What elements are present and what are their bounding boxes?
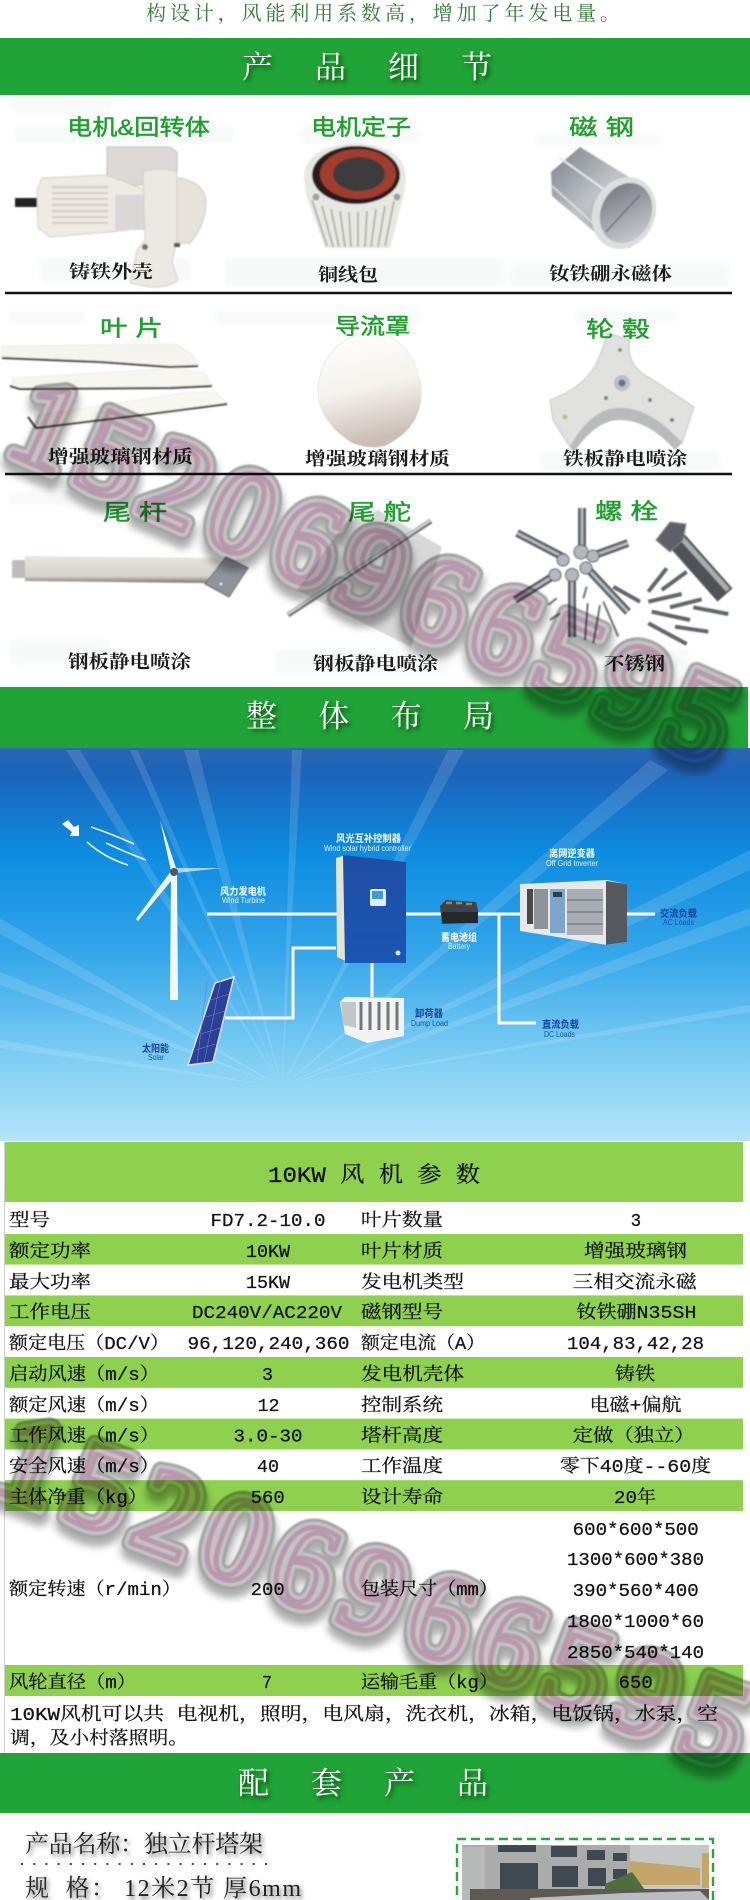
label: solar [142,1042,169,1062]
caption: fiberglass material: 增强玻璃钢材质 [305,448,450,469]
label: AC loads: 交流负载 [660,907,697,920]
row: max power [9,1272,698,1294]
row: rated speed and package size: 额定转速（r/min） [9,1579,181,1601]
row: model: 型号 [9,1210,50,1232]
heading: motor and slewing body: 电机&回转体 [67,115,210,140]
row: rated voltage: 额定电流（A） [361,1333,485,1355]
product name: 产品名称：独立杆塔架 [25,1831,263,1858]
row: rotor diameter: 运输毛重（kg） [361,1672,498,1694]
row: model: 叶片数量 [361,1210,443,1232]
table title: 10KW 风 机 参 数 [268,1163,480,1189]
row: rated wind speed: 12 [258,1397,280,1417]
icon: bolts [515,508,728,644]
heading: motor stator: 电机定子 [311,115,411,140]
label: battery: Battery [448,942,470,951]
panel: product details [2,100,732,674]
icon: hybrid controller [336,855,406,963]
label: dump load: Dump Load [411,1019,448,1028]
watermark: phone number top: 15206966595 [0,352,750,794]
icon: wind turbine [136,820,222,1000]
row: safe wind speed: 40 [257,1458,279,1478]
icon: wind arrow [62,820,146,865]
label: dump load [411,1007,448,1028]
item: blades [2,316,227,467]
heading: bolts: 螺 栓 [595,499,658,524]
section bar: matching products: 配 套 产 品 [238,1766,488,1801]
row: net weight: 主体净重（kg） [9,1487,147,1509]
item: bolts [515,499,728,674]
section bar: product details: 产 品 细 节 [242,50,492,85]
row: rated speed and package size: 390*560*400 [573,1582,699,1602]
icon: tail rod [12,556,248,597]
section bar: product details [0,38,750,95]
label: battery: 蓄电池组 [441,931,477,944]
heading: hub: 轮 毂 [586,317,650,342]
row: working voltage: 磁钢型号 [361,1302,443,1324]
row: working voltage: DC240V/AC220V [192,1304,342,1324]
label: solar: Solar [148,1053,164,1062]
icon: tail vane [288,510,442,647]
icon: battery [440,900,478,924]
sky background [0,748,750,1142]
label: off grid inverter: 离网逆变器 [549,847,595,860]
icon: hub plate [550,333,694,452]
row: working wind speed: 3.0-30 [234,1428,302,1448]
row: net weight: 20年 [614,1486,656,1509]
label: hybrid controller [324,832,411,853]
row: rotor diameter [9,1672,653,1694]
heading: nose cone: 导流罩 [335,314,410,339]
row: start wind speed: 启动风速（m/s） [9,1364,159,1386]
label: hybrid controller: 风光互补控制器 [336,832,401,845]
row: rated voltage: 额定电压（DC/V） [9,1333,169,1355]
label: AC loads: AC Loads [663,918,694,927]
table: 10KW turbine parameters [0,1141,750,1753]
row: start wind speed: 发电机壳体 [361,1364,464,1386]
item: magnet [549,115,672,284]
row: net weight: 设计寿命 [361,1487,443,1509]
row: working voltage: 工作电压 [9,1302,91,1324]
note: usable appliances [10,1704,718,1750]
row: working wind speed: 定做（独立） [573,1426,695,1448]
section bar: matching products [0,1753,750,1813]
row: rated power: 额定功率 [9,1241,91,1263]
row: rated power: 10KW [246,1243,290,1263]
row: net weight [9,1486,656,1509]
row: rated voltage: 104,83,42,28 [567,1335,704,1355]
caption: NdFeB permanent magnet: 钕铁硼永磁体 [549,263,672,284]
row: net weight: 560 [251,1489,285,1509]
row: max power: 15KW [246,1274,290,1294]
row: rated speed and package size: 1300*600*380 [567,1551,704,1571]
row: model: FD7.2-10.0 [210,1212,326,1232]
row: model [9,1210,641,1232]
row: model: 3 [631,1212,641,1232]
row: rated wind speed: 控制系统 [361,1395,443,1417]
caption: stainless steel: 不锈钢 [604,654,665,674]
item: hub [550,317,694,469]
row: rated wind speed [9,1395,682,1417]
watermark: phone number top: 15206966595 [0,352,750,794]
intro text line: 构设计，风能利用系数高，增加了年发电量。 [146,2,620,25]
icon: dump load [340,997,404,1043]
item: tail rod [12,500,248,672]
row: rated speed and package size: 2850*540*140 [567,1644,704,1664]
row: rated speed and package size: 包装尺寸（mm） [361,1579,498,1601]
row: safe wind speed: 零下40度--60度 [560,1456,711,1478]
caption: electrostatic spray iron plate: 铁板静电喷涂 [563,448,688,469]
heading: blades: 叶 片 [100,316,163,341]
label: DC loads: 直流负载 [542,1018,579,1031]
row: rotor diameter: 650 [619,1674,653,1694]
caption: cast iron housing: 铸铁外壳 [69,262,153,282]
section bar: overall layout [0,687,748,748]
label: DC loads [542,1018,579,1039]
watermark: phone number top: 15206966595 [0,360,750,802]
caption: copper coil: 铜线包 [318,265,378,285]
icon: off grid inverter [520,880,627,945]
row: working wind speed [9,1426,695,1448]
label: off grid inverter: Off Grid Inverter [546,859,598,868]
row: safe wind speed: 工作温度 [361,1456,443,1478]
row: rotor diameter: 7 [262,1674,272,1694]
label: off grid inverter [546,847,598,868]
section bar: overall layout: 整 体 布 局 [246,699,494,734]
note: usable appliances: 10KW风机可以共 电视机，照明，电风扇，洗衣机，冰箱，电饭锅，水泵，空 [10,1704,718,1726]
row: rated voltage [9,1333,704,1355]
label: wind turbine [220,885,266,905]
row: rated speed and package size [9,1521,704,1664]
row: rated wind speed: 额定风速（m/s） [9,1395,159,1417]
row: rated speed and package size: 600*600*500 [573,1521,699,1541]
row: max power: 三相交流永磁 [573,1272,698,1294]
row: start wind speed: 铸铁 [615,1364,655,1386]
row: max power: 发电机类型 [361,1272,464,1294]
item: tail vane [288,500,442,674]
icon: magnet steel [551,147,668,260]
row: safe wind speed [9,1456,711,1478]
wiring lines [207,914,655,1023]
row: working wind speed: 塔杆高度 [361,1426,443,1448]
label: AC loads [660,907,697,927]
row: rated wind speed: 电磁+偏航 [590,1395,682,1417]
heading: tail rod: 尾 杆 [103,500,167,525]
heading: magnet: 磁 钢 [569,115,634,140]
product info: tower [21,1831,301,1900]
row: rated power: 叶片材质 [361,1241,443,1263]
heading: tail vane: 尾 舵 [348,500,411,525]
label: solar: 太阳能 [142,1042,169,1055]
table background rows [0,1141,750,1753]
caption: fiberglass material: 增强玻璃钢材质 [48,446,193,467]
label: dump load: 卸荷器 [415,1007,443,1020]
row: working wind speed: 工作风速（m/s） [9,1426,159,1448]
item: motor stator [304,115,411,285]
icon: nose cone [318,330,421,447]
panel: system layout diagram [0,748,750,1142]
label: battery [441,931,477,951]
label: wind turbine: Wind Turbine [222,896,265,905]
row: rated voltage: 96,120,240,360 [188,1335,350,1355]
row: working voltage [9,1302,696,1324]
icon: motor [15,147,206,287]
row: rated power: 增强玻璃钢 [584,1241,687,1263]
icon: stator [304,143,406,248]
row: rated power [9,1241,687,1263]
product photo: tower in factory yard [457,1839,713,1900]
item: nose cone [305,314,450,469]
row: working voltage: 钕铁硼N35SH [576,1302,696,1324]
row: start wind speed [9,1364,655,1386]
row: start wind speed: 3 [262,1366,273,1386]
icon: three blades [2,344,227,428]
label: DC loads: DC Loads [544,1030,575,1039]
label: wind turbine: 风力发电机 [220,885,266,898]
caption: electrostatic spray steel plate: 钢板静电喷涂 [68,651,192,672]
row: rated speed and package size: 200 [251,1581,285,1601]
row: rated speed and package size: 1800*1000*60 [567,1613,704,1633]
row: rotor diameter: 风轮直径（m） [9,1672,136,1694]
note: usable appliances: 调，及小村落照明。 [10,1728,188,1750]
item: motor and slewing body [15,115,210,287]
row: max power: 最大功率 [9,1272,91,1294]
caption: electrostatic spray steel plate: 钢板静电喷涂 [313,653,439,674]
icon: solar panel [188,977,234,1065]
watermark: phone number top: 15206966595 [0,352,750,794]
label: hybrid controller: Wind solar hybrid controller [324,844,411,853]
row: safe wind speed: 安全风速（m/s） [9,1456,159,1478]
